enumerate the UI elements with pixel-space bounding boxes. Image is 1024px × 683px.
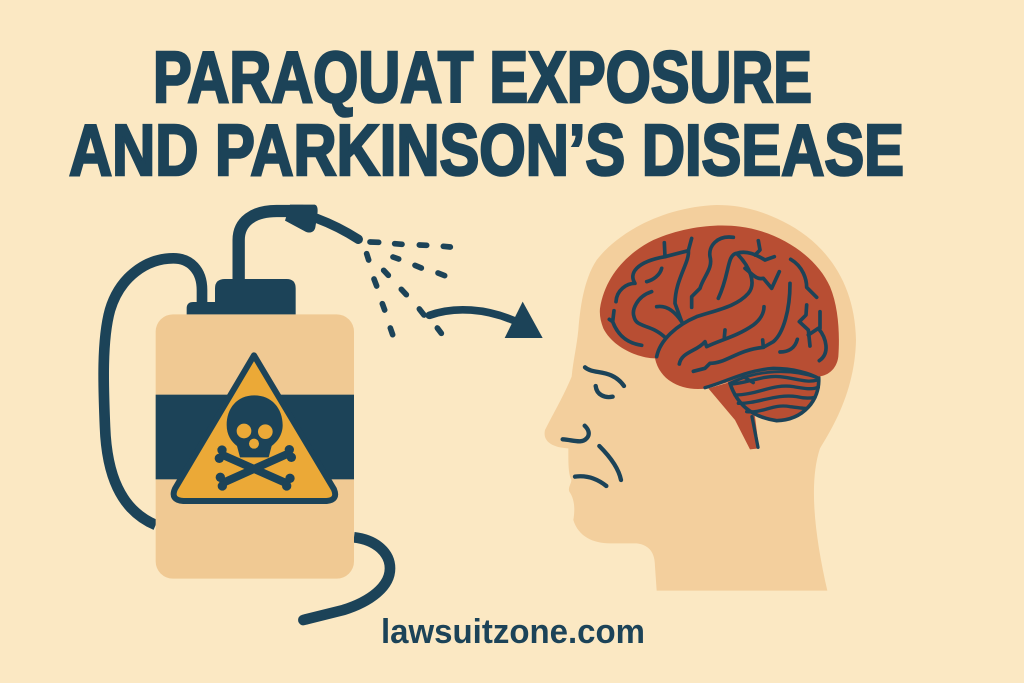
face lines	[563, 367, 624, 486]
head profile	[545, 205, 856, 591]
brain stem	[708, 382, 759, 449]
cerebellum folds	[705, 368, 819, 447]
cerebellum	[730, 371, 819, 421]
icon: sprayer hose and wand	[104, 211, 390, 620]
brain folds	[609, 237, 826, 371]
brain cerebrum	[600, 225, 839, 389]
icon: sprayer cap	[187, 279, 296, 315]
sprayer illustration	[104, 205, 543, 620]
icon: nozzle	[285, 205, 318, 233]
arrow	[429, 302, 543, 338]
spray droplets	[367, 242, 450, 335]
icon: tank body	[156, 314, 354, 579]
tank label band	[156, 395, 354, 479]
skull	[227, 395, 283, 457]
title: PARAQUAT EXPOSURE	[153, 38, 812, 118]
title	[69, 38, 904, 191]
icon: warning triangle with skull	[174, 355, 335, 501]
head with brain illustration	[545, 205, 856, 591]
website label: lawsuitzone.com	[381, 613, 645, 651]
crossbones	[215, 445, 296, 491]
